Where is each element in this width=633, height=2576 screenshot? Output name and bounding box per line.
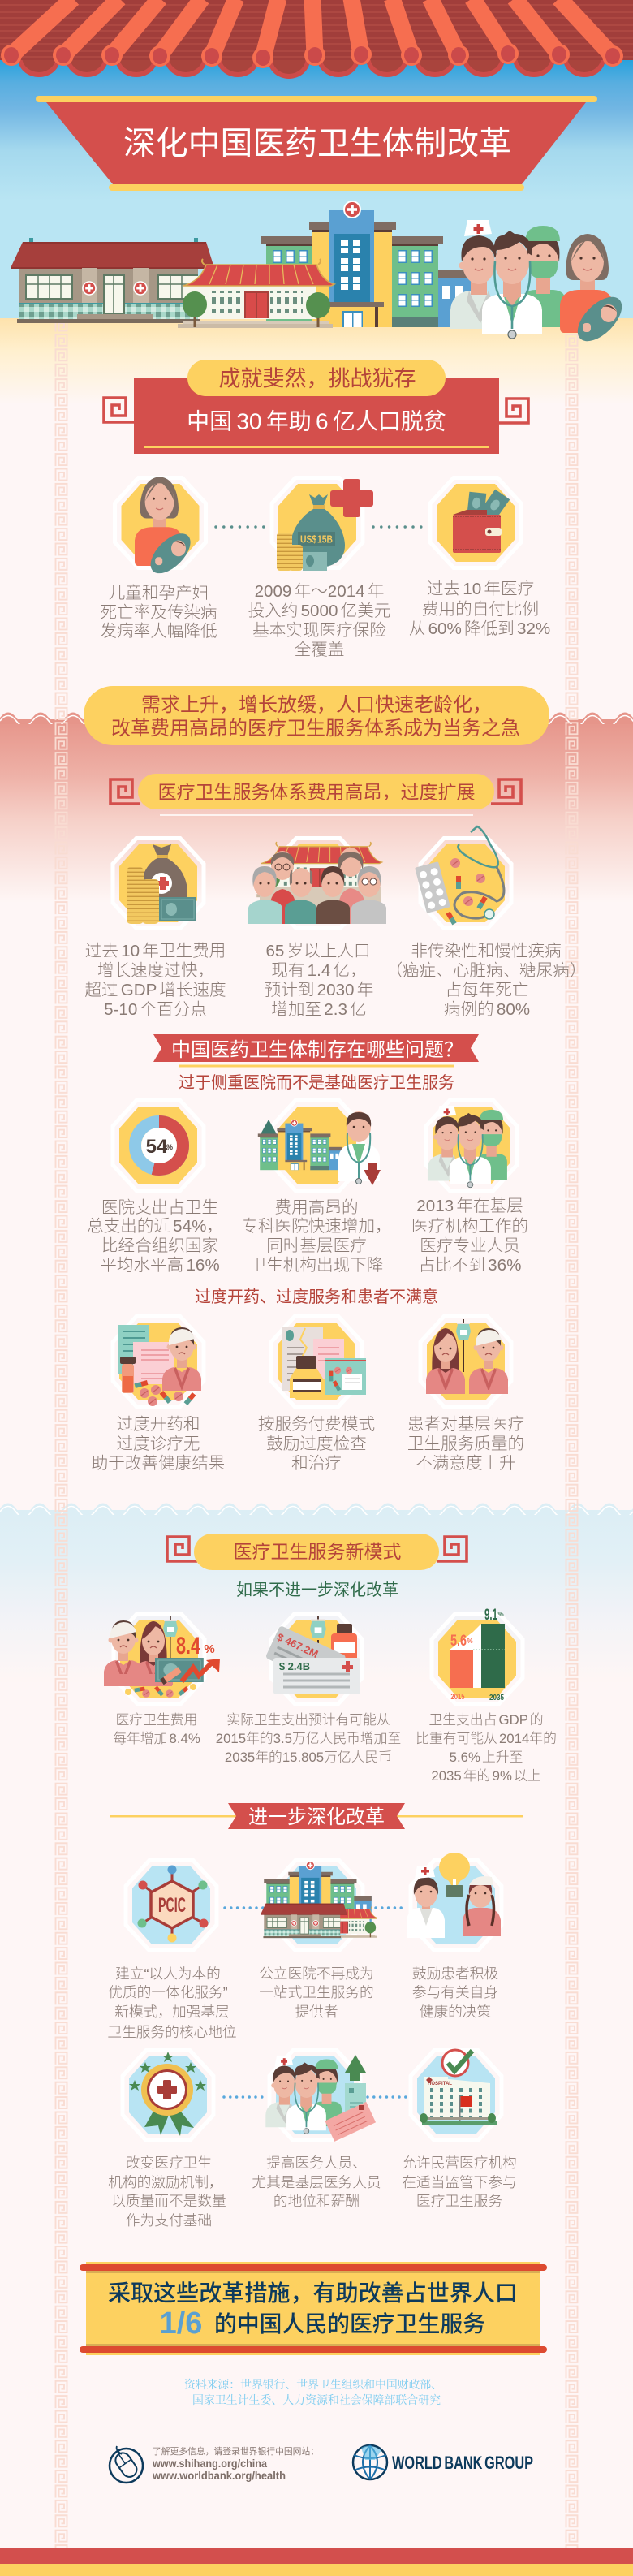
text: chronic diseases: 病例的 80% [444, 1000, 530, 1019]
icon: private hospitals under oversight: HOSPITAL [428, 2082, 452, 2086]
text: out of pocket: 费用的自付比例 [422, 600, 539, 619]
text: expenditure growth [84, 942, 226, 1019]
chart: GDP share bars 2015 and 2035: 9.1 [484, 1607, 497, 1624]
text: dissatisfaction [407, 1415, 524, 1473]
text: hospital share: 平均水平高 16% [100, 1256, 220, 1275]
icon: pills and stethoscope [415, 826, 511, 929]
text: chronic diseases [385, 942, 587, 1019]
text: over prescription: 过度诊疗无 [117, 1435, 200, 1453]
text: maternal and child health [100, 584, 217, 641]
heading ribbon: deepen reform [110, 1803, 523, 1829]
logo: World Bank Group: WORLD BANK GROUP [392, 2453, 533, 2473]
greek key side borders [54, 318, 579, 2549]
text: population aging: 65 岁以上人口 [265, 942, 371, 960]
icon: incentive award medal [123, 2051, 213, 2140]
subheading: without reform: 如果不进一步深化改革 [236, 1581, 398, 1599]
text: projected spending [216, 1712, 401, 1765]
icon: dissatisfied patients [420, 1317, 511, 1406]
icon: PCIC network [126, 1861, 217, 1950]
text: annual cost growth: 医疗卫生费用 [116, 1712, 197, 1728]
text: private providers: 在适当监管下参与 [402, 2174, 517, 2190]
subheading: hospital focus: 过于侧重医院而不是基础医疗卫生服务 [179, 1073, 454, 1092]
text: PCIC model: 建立“以人为本的 [115, 1965, 221, 1982]
footer bands [0, 2548, 633, 2576]
text: sources [184, 2378, 442, 2407]
text: incentives [108, 2155, 226, 2229]
heading: costly system [110, 774, 521, 816]
text: PCIC model [107, 1965, 237, 2040]
text: 500 billion investment: 投入约 5000 亿美元 [248, 602, 390, 620]
text: public hospitals: 提供者 [295, 2004, 338, 2020]
text: staff share: 医疗机构工作的 [411, 1217, 528, 1236]
text: specialist hospitals: 费用高昂的 [275, 1198, 358, 1217]
text: sources: 资料来源：世界银行、世界卫生组织和中国财政部、 [184, 2378, 442, 2392]
text: population aging: 现有 1.4 亿， [271, 961, 367, 980]
text: private providers [402, 2155, 517, 2209]
callout: urgent reform: 改革费用高昂的医疗卫生服务体系成为当务之急 [111, 718, 520, 740]
text: private providers: 医疗卫生服务 [416, 2193, 502, 2209]
text: projected spending: 2015年的3.5万亿人民币增加至 [216, 1731, 401, 1746]
subheading: over-treatment: 过度开药、过度服务和患者不满意 [195, 1288, 438, 1306]
icon: public hospital composite [261, 1861, 377, 1950]
callout: conclusion [80, 2262, 547, 2355]
callout: urgent reform: 需求上升，增长放缓，人口快速老龄化， [141, 694, 492, 716]
connector dots [224, 2095, 263, 2099]
text: GDP share: 5.6% 上升至 [450, 1750, 523, 1765]
illustration: medical staff [450, 220, 566, 339]
text: more information links [152, 2445, 319, 2482]
icon: computer mouse [110, 2446, 143, 2483]
text: maternal and child health: 儿童和孕产妇 [109, 584, 209, 602]
roof [0, 0, 633, 79]
heading ribbon: problems: 中国医药卫生体制存在哪些问题？ [171, 1039, 463, 1061]
icon: money bag [272, 477, 373, 571]
connector dots [225, 1906, 263, 1909]
text: expenditure growth: 增长速度过快， [97, 961, 214, 980]
callout: conclusion: 采取这些改革措施，有助改善占世界人口 [108, 2280, 518, 2306]
text: expenditure growth: 过去 10 年卫生费用 [85, 942, 226, 960]
text: staff status [252, 2155, 381, 2209]
illustration: mother and baby [560, 234, 630, 349]
text: out of pocket: 从 60% 降低到 32% [409, 619, 550, 638]
text: GDP share: 比重有可能从 2014年的 [416, 1731, 557, 1746]
text: public hospitals: 公立医院不再成为 [259, 1965, 374, 1982]
text: incentives: 改变医疗卫生 [126, 2155, 212, 2171]
text: specialist hospitals: 卫生机构出现下降 [250, 1256, 383, 1275]
text: specialist hospitals: 专科医院快速增加， [241, 1217, 392, 1236]
connector dots [376, 1906, 407, 1909]
text: fee for service [258, 1415, 375, 1473]
icon: fee for service [271, 1317, 366, 1406]
text: PCIC model: 卫生服务的核心地位 [107, 2024, 237, 2040]
icon: PCIC network: PCIC [158, 1894, 186, 1917]
text: 500 billion investment: 全覆盖 [295, 641, 344, 659]
panel: achievements heading: 中国 30 年助 6 亿人口脱贫 [187, 409, 446, 434]
icon: private hospitals under oversight [411, 2050, 502, 2140]
chart: GDP share bars 2015 and 2035: 5.6 [450, 1633, 467, 1650]
text: more information links: www.worldbank.org/health [152, 2469, 286, 2482]
icon: mother and baby [115, 477, 206, 580]
text: public hospitals [259, 1965, 374, 2020]
text: fee for service: 按服务付费模式 [258, 1415, 375, 1434]
text: chronic diseases: 非传染性和慢性疾病 [411, 942, 562, 960]
callout: conclusion: 1/6 [160, 2306, 202, 2341]
icon: wallet [430, 477, 521, 568]
text: dissatisfaction: 不满意度上升 [416, 1454, 516, 1473]
text: patient participation: 鼓励患者积极 [412, 1965, 498, 1982]
icon: donut 54 percent: 54 [146, 1136, 168, 1158]
text: specialist hospitals: 同时基层医疗 [266, 1236, 367, 1255]
text: GDP share [416, 1712, 557, 1784]
text: hospital share: 医院支出占卫生 [101, 1198, 218, 1217]
icon: staff with rising pay [265, 2051, 376, 2142]
icon: expenditure money bag [113, 838, 204, 929]
heading: new model: 医疗卫生服务新模式 [234, 1541, 401, 1562]
text: dissatisfaction: 患者对基层医疗 [407, 1415, 524, 1434]
text: sources: 国家卫生计生委、人力资源和社会保障部联合研究 [192, 2393, 441, 2407]
icon: bills [265, 1614, 362, 1703]
text: incentives: 作为支付基础 [126, 2212, 212, 2229]
icon: hospital, doctor, down arrow [258, 1101, 381, 1190]
text: population aging [265, 942, 373, 1019]
text: annual cost growth [113, 1712, 200, 1746]
text: PCIC model: 新模式，加强基层 [114, 2004, 230, 2020]
text: staff status: 尤其是基层医务人员 [252, 2174, 381, 2190]
text: population aging: 增加至 2.3 亿 [271, 1000, 367, 1019]
text: private providers: 允许民营医疗机构 [402, 2155, 517, 2171]
text: staff share [411, 1197, 528, 1275]
text: over prescription [92, 1415, 225, 1473]
heading: costly system: 医疗卫生服务体系费用高昂，过度扩展 [157, 781, 476, 802]
text: patient participation: 健康的决策 [420, 2004, 492, 2020]
icon: money bag: US$ 15B [300, 533, 333, 546]
text: hospital share: 总支出的近 54%， [87, 1217, 223, 1236]
chart: GDP share bars 2015 and 2035 [432, 1607, 523, 1703]
text: over prescription: 过度开药和 [117, 1415, 200, 1434]
connector dots [373, 525, 421, 529]
icon: cost growth 8.4 percent [104, 1614, 220, 1703]
text: annual cost growth: 每年增加 8.4% [113, 1731, 200, 1746]
text: fee for service: 鼓励过度检查 [266, 1435, 367, 1453]
text: 500 billion investment: 2009 年～2014 年 [255, 582, 384, 601]
connector dots [368, 2095, 407, 2099]
connector dots [216, 525, 264, 529]
icon: cost growth 8.4 percent: % [204, 1642, 215, 1656]
text: staff share: 占比不到 36% [419, 1256, 521, 1275]
text: more information links: 了解更多信息，请登录世界银行中国网站： [153, 2445, 319, 2457]
text: hospital share: 比经合组织国家 [101, 1236, 218, 1255]
text: dissatisfaction: 卫生服务质量的 [407, 1435, 524, 1453]
text: patient participation [412, 1965, 498, 2020]
icon: bills: $ 2.4B [279, 1660, 310, 1672]
text: specialist hospitals [241, 1198, 392, 1275]
icon: patient decision making [407, 1853, 502, 1950]
text: GDP share: 2035 年的 9% 以上 [431, 1768, 541, 1784]
text: expenditure growth: 5-10 个百分点 [104, 1000, 207, 1019]
icon: three medical staff [426, 1101, 517, 1190]
heading ribbon: problems [153, 1034, 479, 1067]
chart: GDP share bars 2015 and 2035: % [467, 1638, 473, 1645]
text: fee for service: 和治疗 [291, 1454, 342, 1473]
text: 500 billion investment: 基本实现医疗保险 [252, 621, 386, 640]
icon: elderly population [248, 838, 386, 929]
text: PCIC model: 优质的一体化服务” [108, 1984, 228, 2000]
text: staff share: 2013 年在基层 [416, 1197, 523, 1215]
icon: over prescription [113, 1317, 204, 1406]
heading ribbon: deepen reform: 进一步深化改革 [248, 1806, 385, 1828]
text: staff status: 提高医务人员、 [266, 2155, 367, 2171]
text: maternal and child health: 发病率大幅降低 [100, 622, 217, 641]
chart: GDP share bars 2015 and 2035: 2015 [451, 1693, 465, 1702]
text: staff status: 的地位和薪酬 [273, 2193, 360, 2209]
icon: donut 54 percent [113, 1101, 204, 1190]
text: staff share: 医疗专业人员 [420, 1236, 520, 1255]
text: patient participation: 参与有关自身 [412, 1984, 498, 2000]
heading: new model [167, 1534, 467, 1570]
text: public hospitals: 一站式卫生服务的 [259, 1984, 374, 2000]
text: expenditure growth: 超过 GDP 增长速度 [84, 981, 226, 999]
text: incentives: 机构的激励机制， [108, 2174, 223, 2190]
text: projected spending: 2035年的15.805万亿人民币 [225, 1750, 392, 1765]
text: 500 billion investment [248, 582, 390, 659]
text: hospital share [87, 1198, 223, 1275]
chart: GDP share bars 2015 and 2035: 2035 [489, 1694, 504, 1702]
text: out of pocket: 过去 10 年医疗 [427, 580, 534, 598]
sky background [0, 0, 633, 320]
title banner: 深化中国医药卫生体制改革 [123, 126, 511, 162]
text: chronic diseases: 占每年死亡 [446, 981, 528, 999]
icon: donut 54 percent: % [166, 1143, 173, 1151]
text: chronic diseases: （癌症、心脏病、糖尿病） [385, 961, 587, 980]
text: GDP share: 卫生支出占 GDP 的 [428, 1712, 544, 1728]
text: projected spending: 实际卫生支出预计有可能从 [226, 1712, 390, 1728]
illustration: buildings [11, 201, 472, 328]
chart: GDP share bars 2015 and 2035: % [497, 1611, 504, 1618]
icon: bills: $ 467.2M [275, 1631, 321, 1660]
text: over prescription: 助于改善健康结果 [92, 1454, 225, 1473]
text: population aging: 预计到 2030 年 [265, 981, 373, 999]
logo: World Bank Group [353, 2445, 533, 2479]
panel: achievements heading [104, 360, 528, 454]
callout: conclusion: 的中国人民的医疗卫生服务 [214, 2311, 485, 2337]
title banner [36, 96, 597, 191]
callout: urgent reform [84, 686, 549, 745]
icon: cost growth 8.4 percent: 8.4 [176, 1633, 200, 1659]
text: maternal and child health: 死亡率及传染病 [100, 603, 217, 622]
panel: achievements heading: 成就斐然，挑战犹存 [219, 367, 416, 391]
text: incentives: 以质量而不是数量 [111, 2193, 226, 2209]
text: out of pocket [409, 580, 550, 638]
text: more information links: www.shihang.org/china [152, 2457, 267, 2470]
